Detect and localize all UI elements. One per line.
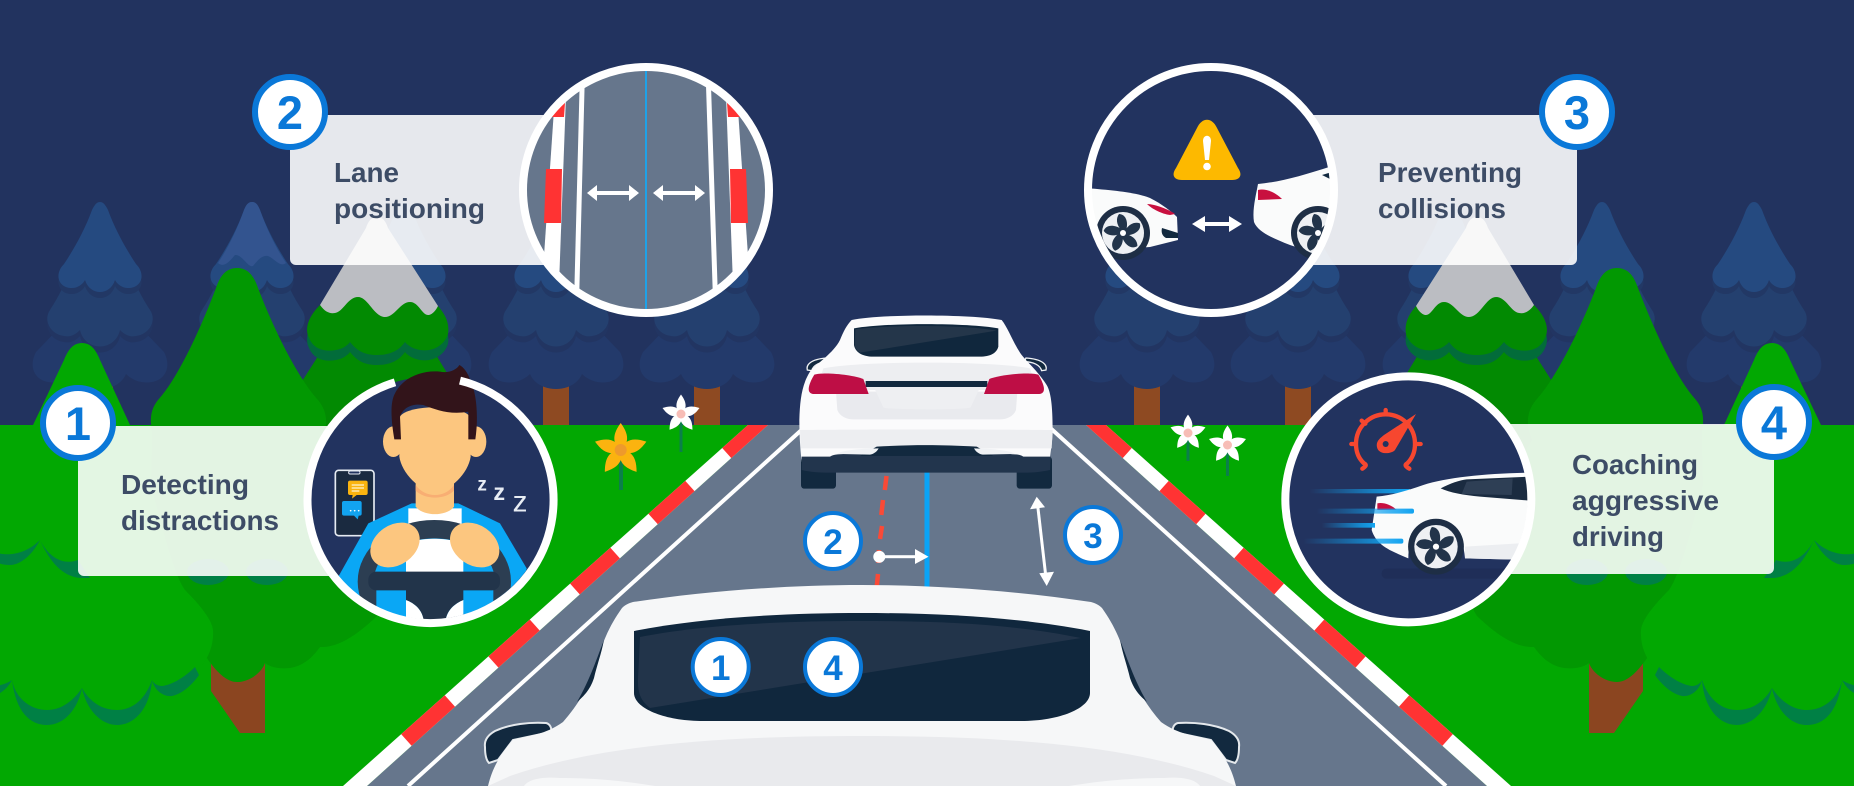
car left vent (1162, 228, 1178, 238)
speedometer gauge (1351, 410, 1421, 469)
rear window (634, 613, 1090, 721)
wheel hub (406, 590, 464, 619)
panel: coaching aggressive driving (1440, 424, 1774, 574)
panel background (1440, 424, 1774, 574)
arrow left (587, 185, 639, 201)
trunk strip (866, 381, 987, 387)
panel text: Preventing (1378, 157, 1522, 188)
offset arrow (873, 549, 928, 564)
panel: detecting distractions (78, 426, 408, 576)
lower bumper band (800, 429, 1053, 448)
badge 4: 4 (1761, 396, 1787, 449)
curb left (544, 102, 566, 272)
tail light (1377, 503, 1397, 510)
lens ring (1088, 67, 1334, 313)
panel background (290, 115, 640, 265)
panel background (78, 426, 408, 576)
blue lane centre line (924, 470, 930, 590)
badge 2: 2 (277, 86, 303, 139)
badge 1: 1 (65, 397, 91, 450)
dark side sliver left (577, 640, 604, 702)
body (799, 315, 1053, 462)
face (399, 407, 471, 492)
trunk lid (817, 363, 1037, 390)
side mirror left (485, 723, 551, 763)
lower white right (446, 600, 464, 618)
road shadow (1382, 569, 1515, 579)
ears (383, 426, 486, 457)
road badge 3 (1065, 507, 1121, 563)
shirt (408, 508, 462, 524)
mirrors (807, 358, 1046, 371)
hand left (370, 522, 420, 568)
windshield badge 1: 1 (711, 649, 730, 688)
navy pine tree row (33, 202, 1821, 389)
sleeping z letters: z (493, 479, 505, 505)
left curb and lane line (343, 415, 807, 786)
lens: distracted driver (307, 365, 554, 643)
road (343, 415, 1511, 786)
car right trim (1322, 172, 1330, 179)
highlight right (1069, 778, 1200, 786)
hair (392, 365, 477, 439)
car right tail light (1258, 189, 1282, 200)
wheel (1408, 519, 1464, 575)
jacket (338, 503, 527, 601)
lower jacket right (463, 590, 494, 614)
shirt through wheel (406, 539, 463, 573)
gap arrow (1192, 216, 1242, 232)
sleeping z letters: z (477, 475, 487, 496)
road surface (367, 425, 1487, 786)
lens ring (523, 67, 769, 313)
flower: white left (661, 395, 701, 452)
red dashed drift path (877, 476, 886, 586)
curb left red (544, 103, 565, 223)
left green trees (0, 217, 475, 733)
lower jacket left (376, 590, 406, 616)
car left wheel (1096, 206, 1150, 260)
badge 3 (1542, 77, 1612, 147)
panel: lane positioning (290, 115, 640, 265)
bumper dark (860, 445, 993, 456)
centre line (645, 60, 647, 320)
snow on navy tree (218, 202, 286, 266)
lower white left (406, 600, 424, 619)
far car rear view (799, 315, 1053, 489)
tail light right (984, 374, 1044, 394)
background navy forest (33, 202, 1821, 426)
lens: lane positioning (523, 60, 769, 320)
side window (1441, 477, 1530, 501)
road badge 3: 3 (1083, 517, 1103, 556)
window reflection (855, 326, 997, 353)
windshield badge 4 (805, 639, 861, 695)
speed lines (1303, 509, 1414, 544)
panel text: collisions (1378, 193, 1506, 224)
lens ring (1285, 376, 1531, 622)
grass ground (0, 425, 1854, 786)
road markings: lane drift indicator (873, 470, 930, 590)
dark side sliver right (1120, 640, 1147, 702)
lane lines (577, 70, 716, 300)
arrow right (653, 185, 705, 201)
side mirror right (1173, 723, 1239, 763)
following distance arrow (1030, 497, 1054, 586)
windshield badge 4: 4 (823, 649, 843, 688)
badge 2 (255, 77, 325, 147)
tail light left (809, 374, 869, 394)
car body (1372, 473, 1530, 560)
car left (1092, 188, 1178, 248)
wheel gap (374, 538, 494, 618)
exclamation mark (1203, 136, 1211, 170)
car body (488, 585, 1236, 786)
flower: yellow (593, 423, 648, 490)
car left tail light (1147, 204, 1175, 215)
lens: aggressive driving (1285, 376, 1531, 622)
panel text: positioning (334, 193, 485, 224)
top speed line (1310, 489, 1410, 493)
curb right (726, 102, 748, 272)
badge 3: 3 (1564, 86, 1590, 139)
panel text: Lane (334, 157, 399, 188)
hood panel (488, 736, 1236, 786)
lens ring (308, 381, 554, 623)
sleeping z letters: z (513, 486, 527, 519)
exhaust right (974, 448, 1015, 455)
panel text: Detecting (121, 469, 249, 500)
right green trees (1379, 217, 1854, 733)
rear window (854, 324, 998, 357)
flower: white right 2 (1208, 426, 1247, 476)
window highlight (1462, 478, 1513, 495)
right curb and lane line (1047, 415, 1511, 786)
tree trunks (87, 380, 1767, 426)
phone (335, 470, 374, 536)
bumper (802, 453, 1051, 473)
panel text: aggressive (1572, 485, 1719, 516)
exhaust left (837, 448, 879, 455)
neck (416, 483, 454, 514)
panel text: driving (1572, 521, 1664, 552)
badge 4 (1739, 387, 1809, 457)
panel background (1220, 115, 1577, 265)
wheel rim (358, 520, 511, 616)
badge 1 (43, 388, 113, 458)
near car rear view (485, 585, 1239, 786)
hand right (450, 522, 500, 568)
neck shadow (416, 485, 454, 498)
sleeping z letters (477, 475, 527, 519)
road badge 2 (805, 513, 861, 569)
warning triangle (1174, 120, 1240, 180)
road badge 2: 2 (823, 523, 843, 562)
wheel bar (368, 572, 500, 590)
lower shading (1465, 543, 1530, 560)
panel text: distractions (121, 505, 279, 536)
highlight left (524, 778, 655, 786)
lens: preventing collisions (1085, 67, 1345, 313)
window reflection (638, 621, 1081, 708)
tyres (801, 457, 836, 489)
windshield badge 1 (693, 639, 749, 695)
trunk panel (836, 392, 1017, 419)
curb right red (727, 103, 748, 223)
car right (1253, 167, 1330, 247)
flower: white right 1 (1169, 415, 1207, 461)
plate recess (874, 387, 980, 409)
car right wheel (1291, 206, 1329, 258)
panel: preventing collisions (1220, 115, 1577, 265)
panel text: Coaching (1572, 449, 1698, 480)
